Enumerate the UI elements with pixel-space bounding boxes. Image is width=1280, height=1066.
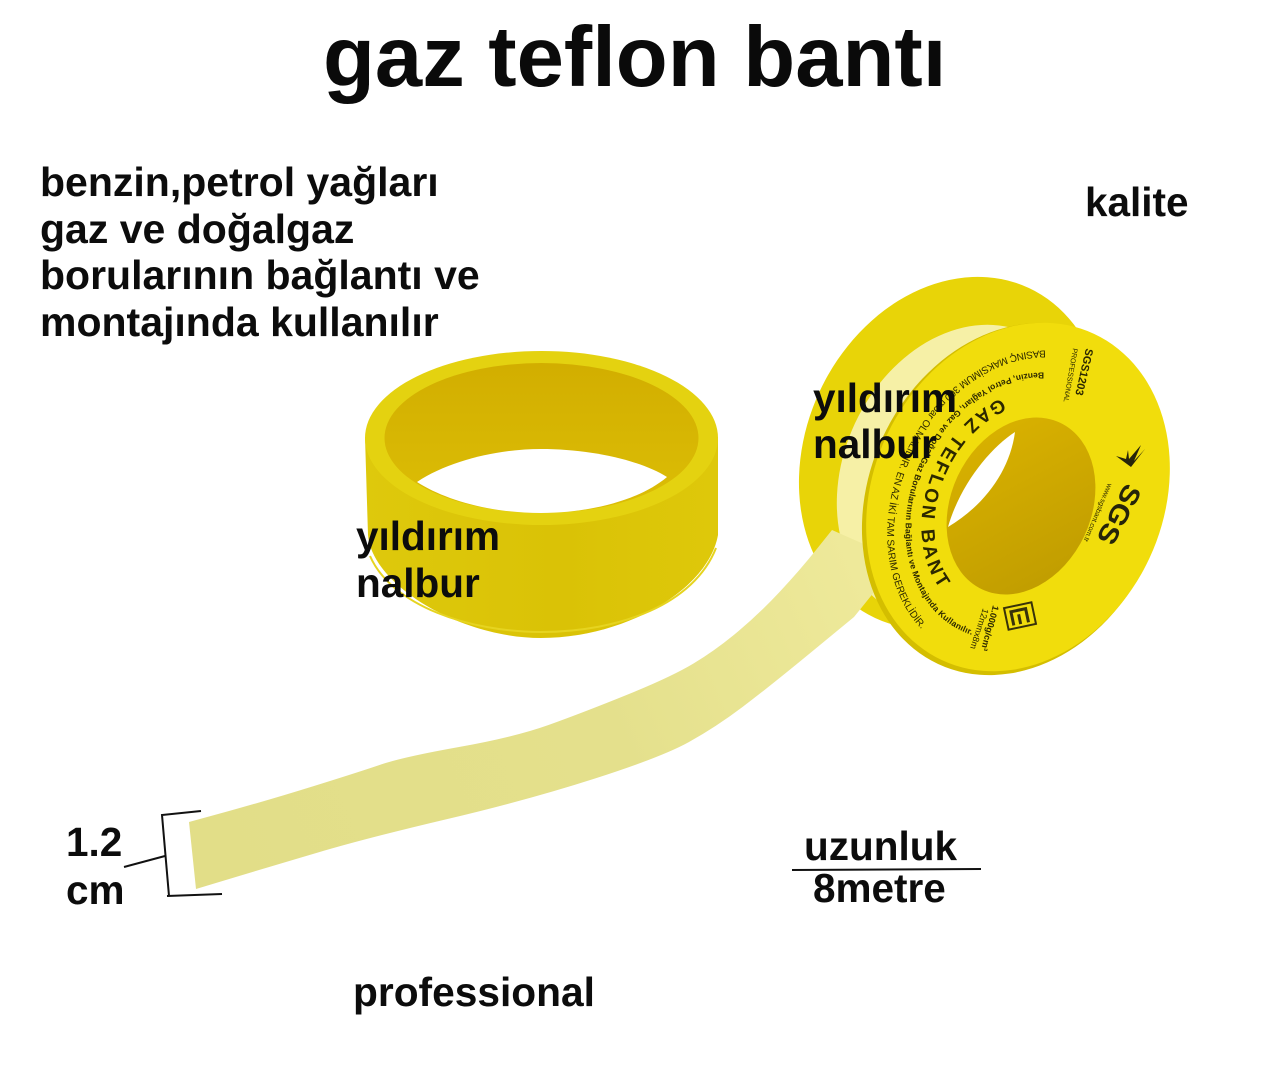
description text block: montajında kullanılır [40, 299, 439, 345]
label: yıldırım nalbur on spool: nalbur [813, 421, 937, 467]
icon: SGS bird logo [1116, 445, 1145, 467]
model code: SGS1203 [1072, 347, 1095, 397]
label: 1.2 cm [66, 819, 125, 913]
label: yıldırım nalbur on ring: nalbur [356, 560, 480, 606]
yellow core ring [365, 351, 718, 638]
see-through gap [948, 432, 1015, 527]
label: yıldırım nalbur on ring [356, 513, 500, 606]
loose tape strip [189, 530, 900, 889]
label: length 8 metres: 8metre [813, 865, 946, 911]
back flange [743, 226, 1161, 680]
spool hole [919, 393, 1123, 619]
ring bottom lip [370, 548, 716, 632]
professional print: PROFESSIONAL [1062, 348, 1078, 403]
label: 1.2 cm: 1.2 [66, 819, 122, 865]
website print: www.sgsbant.com.tr [1081, 481, 1113, 543]
label: length 8 metres [792, 823, 981, 911]
tape roll [790, 284, 1134, 662]
label: professional: professional [353, 969, 595, 1015]
printed ring text [887, 350, 1045, 635]
label: yıldırım nalbur on spool: yıldırım [813, 375, 957, 421]
label: yıldırım nalbur on spool [813, 375, 957, 467]
usage print: Benzin, Petrol Yağları, Gaz ve Doğal Gaz Borularının Bağlantı ve Montajında Kullanılır. [904, 372, 1044, 635]
teflon tape spool [176, 276, 1170, 896]
density print: 1.000g/cm³ [979, 604, 1001, 652]
title: gaz teflon bantı [323, 10, 946, 105]
front flange face [811, 273, 1225, 721]
label: GAZ TEFLON BANT: GAZ TEFLON BANT [921, 400, 1004, 585]
SGS logo text: SGS [1091, 479, 1147, 550]
description text block: gaz ve doğalgaz [40, 206, 354, 252]
width bracket [124, 811, 222, 896]
ring inner wall [384, 363, 698, 513]
label: kalite: kalite [1085, 179, 1189, 225]
ring outer body [365, 437, 718, 638]
label: yıldırım nalbur on ring: yıldırım [356, 513, 500, 559]
label: 1.2 cm: cm [66, 867, 125, 913]
front flange edge [806, 272, 1224, 726]
ring hole [417, 449, 667, 513]
size print: 12mmx8m [968, 607, 991, 650]
description text block: benzin,petrol yağları [40, 159, 439, 205]
description text block [40, 159, 480, 345]
label: length 8 metres: uzunluk [804, 823, 957, 869]
description text block: borularının bağlantı ve [40, 252, 480, 298]
ring top rim [365, 351, 718, 525]
icon: product mark [1004, 602, 1036, 630]
warning print: BASINÇ MAKSİMUM 300 mbar OLMALIDIR. EN AZ İKİ TAM SARIM GEREKLİDİR. [887, 350, 1045, 628]
